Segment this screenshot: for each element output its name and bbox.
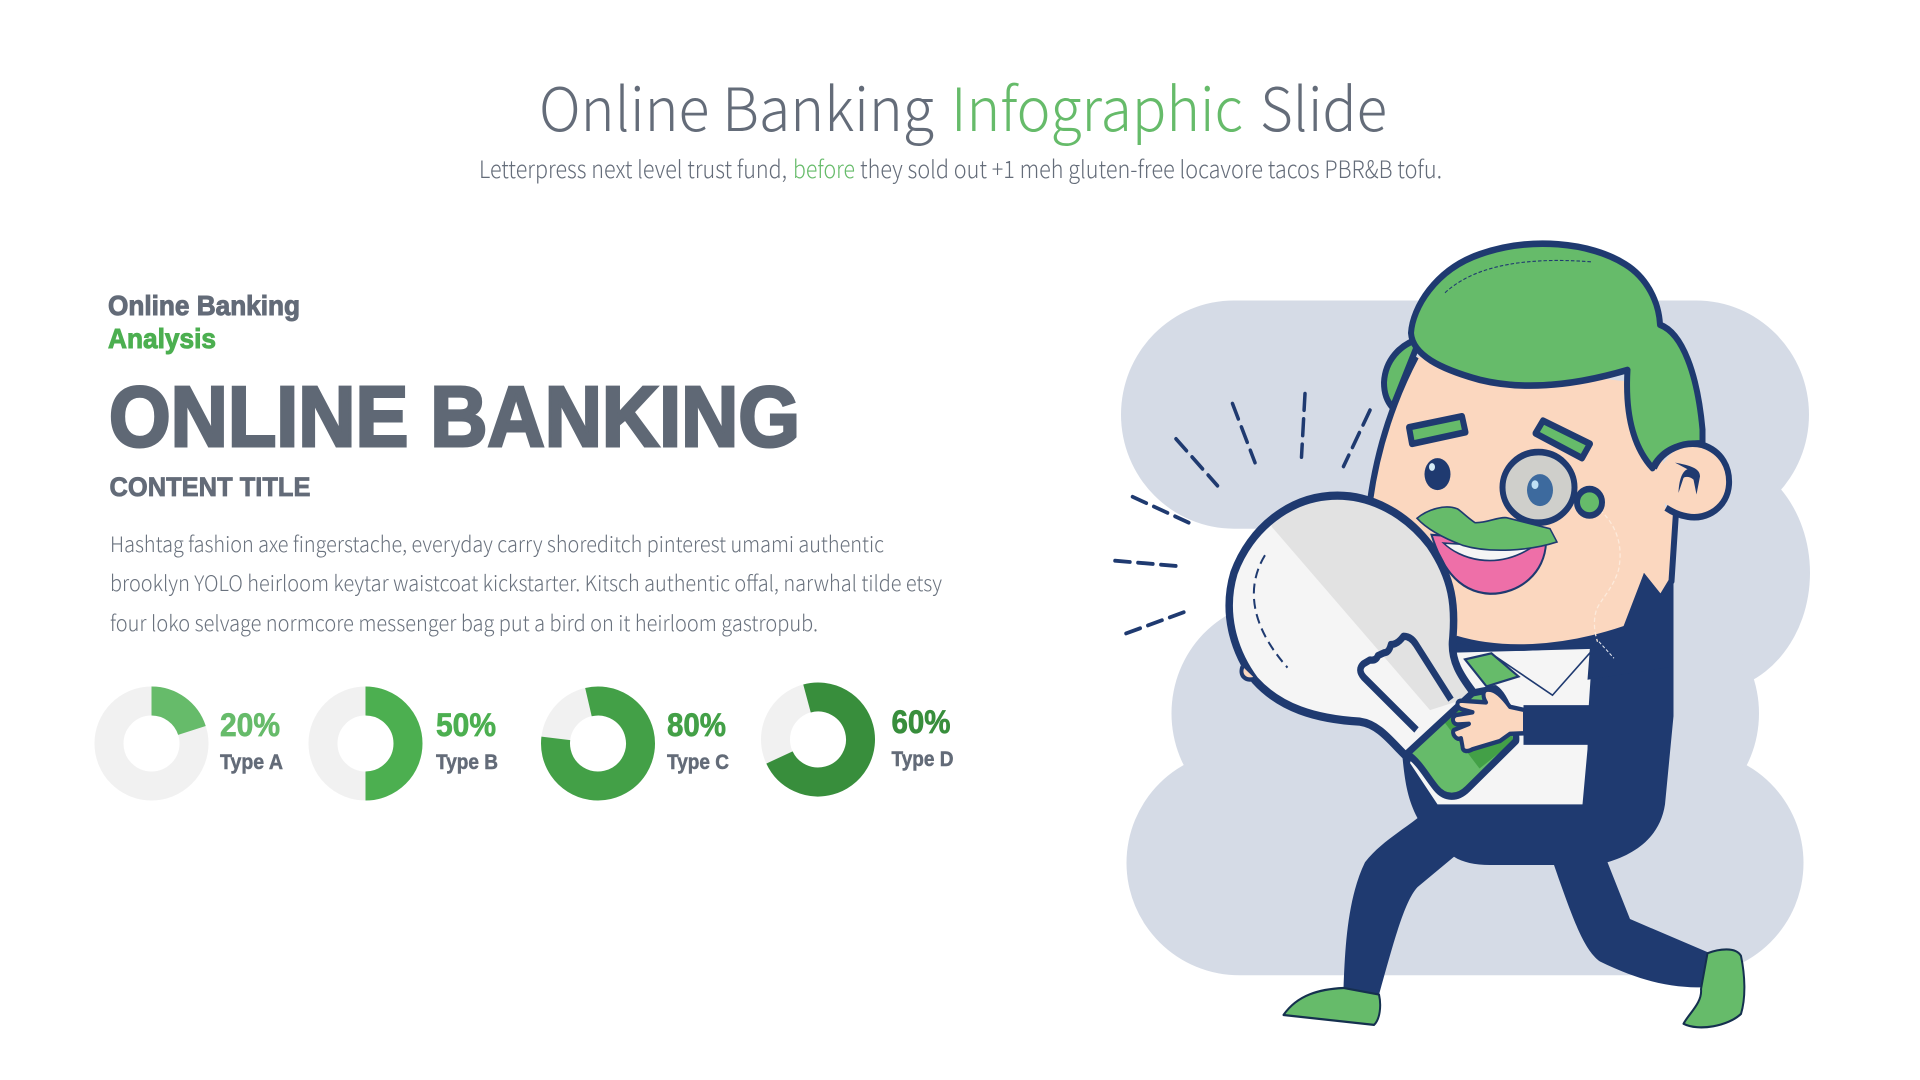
subtitle — [479, 150, 1442, 185]
donut: Type D: Type D — [892, 748, 954, 771]
donut: Type A: Type A — [220, 751, 283, 774]
eyebrow heading: Online Banking — [108, 290, 300, 321]
left shoe — [1284, 988, 1380, 1025]
donut: Type B — [323, 701, 498, 786]
ear — [1654, 444, 1729, 518]
title — [539, 62, 1387, 149]
background blob — [1121, 300, 1810, 975]
body and legs — [1344, 573, 1708, 995]
light rays — [1115, 394, 1370, 633]
donut: Type B: Type B — [436, 751, 498, 774]
eyebrow heading — [108, 290, 300, 354]
donut: Type D — [766, 687, 954, 792]
hair — [1411, 244, 1702, 468]
eyebrows — [1409, 416, 1590, 458]
collar stitch dashes — [1599, 642, 1614, 658]
body text — [110, 528, 942, 638]
subtitle: Letterpress next level trust fund, — [479, 150, 787, 185]
head — [1370, 357, 1676, 646]
subtitle: they sold out +1 meh gluten-free locavore tacos PBR&B tofu. — [860, 150, 1442, 185]
donut: Type B: 50% — [436, 707, 496, 743]
chin and cheek outline — [1370, 357, 1676, 648]
title: Infographic — [951, 62, 1243, 149]
infographic slide — [94, 82, 1810, 1028]
jacket collar spike — [1588, 573, 1674, 680]
donut: Type A: 20% — [220, 707, 280, 743]
hand — [1453, 690, 1525, 751]
left eye — [1424, 458, 1450, 490]
cheek dashes — [1594, 510, 1620, 642]
body text: four loko selvage normcore messenger bag put a bird on it heirloom gastropub. — [110, 607, 818, 638]
bulb base — [1407, 689, 1516, 796]
monocle — [1502, 452, 1602, 523]
shirt — [1410, 649, 1592, 804]
donut: Type C — [547, 693, 729, 794]
subtitle: before — [793, 150, 855, 185]
illustration: cartoon banker carrying light bulb — [1115, 244, 1810, 1027]
eyebrow heading: Analysis — [108, 323, 216, 354]
donut: Type C: 80% — [667, 707, 726, 743]
content title: CONTENT TITLE — [110, 472, 310, 502]
collar line — [1492, 650, 1592, 695]
arm sleeve — [1524, 705, 1591, 745]
donut: Type C: Type C — [667, 751, 729, 774]
right shoe — [1684, 949, 1744, 1027]
main heading: ONLINE BANKING — [109, 370, 800, 465]
body text: Hashtag fashion axe fingerstache, everyday carry shoreditch pinterest umami authentic — [110, 528, 884, 559]
donut: Type D: 60% — [892, 704, 950, 740]
mouth — [1432, 535, 1546, 594]
donut: Type A — [109, 701, 283, 786]
body text: brooklyn YOLO heirloom keytar waistcoat kickstarter. Kitsch authentic offal, narwhal tilde etsy — [110, 567, 942, 598]
title: Online Banking — [539, 62, 934, 149]
back hair — [1384, 339, 1420, 407]
mustache — [1417, 507, 1557, 550]
title: Slide — [1260, 62, 1387, 149]
tie — [1465, 653, 1518, 686]
light bulb — [1229, 485, 1480, 758]
